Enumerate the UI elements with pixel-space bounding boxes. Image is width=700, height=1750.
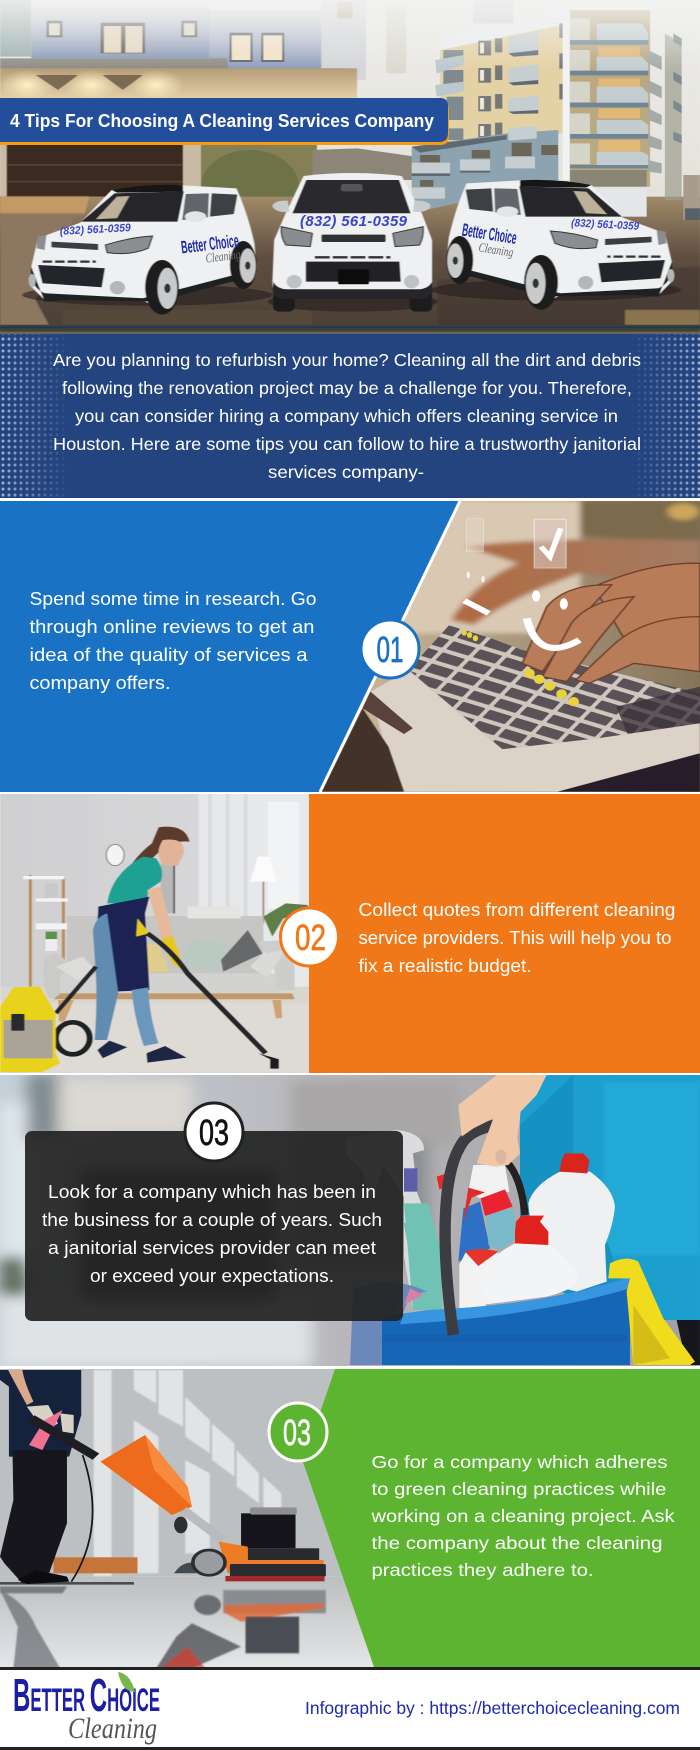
right bottle bbox=[528, 1172, 615, 1292]
front bottle bbox=[486, 1244, 568, 1304]
handle bbox=[445, 1125, 495, 1335]
yellow cloth bbox=[608, 1259, 695, 1365]
car left: logo: Cleaning bbox=[205, 246, 242, 266]
tip 1 text: company offers. bbox=[30, 673, 170, 693]
tip 1 text: Spend some time in research. Go bbox=[30, 589, 316, 609]
panel: tip 4 bbox=[0, 1367, 700, 1668]
photo: hands on laptop keyboard bbox=[312, 500, 700, 793]
title banner bbox=[0, 98, 449, 145]
panel: introduction bbox=[0, 334, 700, 498]
tip 4 text: working on a cleaning project. Ask bbox=[370, 1506, 675, 1526]
car left: logo bbox=[181, 234, 240, 262]
tip 3 text: a janitorial services provider can meet bbox=[48, 1238, 376, 1258]
folded cloth beside the bucket bbox=[350, 1282, 427, 1365]
tip 4 text: to green cleaning practices while bbox=[372, 1479, 666, 1499]
intro text bbox=[53, 350, 641, 482]
tip 2 text: Collect quotes from different cleaning bbox=[358, 900, 676, 920]
logo: Better Choice Cleaning: Cleaning bbox=[68, 1712, 157, 1745]
hero photo: house, tower and cars bbox=[0, 0, 700, 335]
left small bottle bbox=[459, 1252, 498, 1308]
car left: phone number: (832) 561-0359 bbox=[60, 222, 132, 238]
footer bbox=[0, 1667, 700, 1750]
morning haze over the top of the scene bbox=[0, 0, 700, 70]
bucket body bbox=[382, 1277, 630, 1365]
badge 03 dark: 03 bbox=[199, 1112, 229, 1153]
tip 4 text: the company about the cleaning bbox=[372, 1533, 662, 1553]
logo: Better Choice Cleaning bbox=[13, 1669, 160, 1745]
tip 2 text bbox=[358, 900, 676, 976]
tip 1 text: through online reviews to get an bbox=[30, 617, 314, 637]
logo: Better Choice Cleaning: BETTER CHOICE bbox=[13, 1669, 160, 1721]
photo: woman vacuuming living room bbox=[0, 793, 312, 1077]
badge 03 green: 03 bbox=[283, 1412, 311, 1453]
car right: phone number: (832) 561-0359 bbox=[571, 217, 640, 233]
badge 01: 01 bbox=[376, 629, 404, 670]
panel: tip 2 bbox=[0, 793, 700, 1077]
badge 02: 02 bbox=[295, 917, 326, 958]
intro text: you can consider hiring a company which offers cleaning service in bbox=[75, 406, 618, 426]
spray bottle bbox=[392, 1130, 424, 1310]
tip 4 text: Go for a company which adheres bbox=[372, 1452, 668, 1472]
tip 4 text: practices they adhere to. bbox=[372, 1560, 594, 1580]
car right: logo: Cleaning bbox=[478, 239, 515, 260]
car centre bbox=[268, 173, 437, 312]
website credit: Infographic by : https://betterchoicecleaning.com bbox=[305, 1698, 680, 1718]
hand bbox=[458, 1075, 547, 1167]
photo: floor polishing machine bbox=[0, 1367, 384, 1668]
tip 3 text: Look for a company which has been in bbox=[48, 1182, 376, 1202]
car right: logo bbox=[462, 223, 516, 259]
woman bbox=[132, 826, 190, 864]
intro text: services company- bbox=[268, 462, 424, 482]
dark text box bbox=[25, 1131, 403, 1321]
tip 1 text bbox=[30, 589, 316, 693]
photo: bucket of cleaning supplies bbox=[0, 1073, 700, 1367]
car left: logo: Better Choice bbox=[180, 231, 240, 257]
car left bbox=[22, 185, 272, 315]
lamp bbox=[250, 857, 277, 882]
badge 02 bbox=[280, 908, 338, 966]
vacuum bbox=[147, 933, 266, 1053]
car centre: phone number: (832) 561-0359 bbox=[300, 213, 408, 230]
intro text: Houston. Here are some tips you can follow to hire a trustworthy janitorial bbox=[53, 434, 641, 454]
tip 4 text bbox=[370, 1452, 675, 1580]
tip 3 text bbox=[42, 1182, 382, 1286]
panel: tip 1 bbox=[0, 500, 700, 793]
tip 2 text: service providers. This will help you to bbox=[358, 928, 672, 948]
intro text: Are you planning to refurbish your home? Cleaning all the dirt and debris bbox=[53, 350, 641, 370]
hero photo: house, tower and cars: Better Choice bbox=[461, 220, 518, 248]
tip 2 text: fix a realistic budget. bbox=[358, 956, 532, 976]
machine bbox=[31, 1418, 96, 1457]
title: 4 Tips For Choosing A Cleaning Services Company bbox=[10, 110, 435, 131]
badge 03 dark bbox=[185, 1103, 243, 1161]
clock bbox=[106, 844, 124, 866]
intro text: following the renovation project may be a challenge for you. Therefore, bbox=[62, 378, 632, 398]
panel: tip 3 bbox=[0, 1073, 700, 1367]
badge 01 bbox=[361, 620, 419, 678]
bucket, bottles and hand bbox=[350, 1075, 700, 1365]
badge 03 green bbox=[269, 1403, 327, 1461]
back bottle bbox=[468, 1165, 509, 1198]
worker bbox=[0, 1370, 81, 1457]
tip 3 text: or exceed your expectations. bbox=[90, 1266, 334, 1286]
tip 3 text: the business for a couple of years. Such bbox=[42, 1210, 382, 1230]
green shape bbox=[303, 1369, 700, 1667]
sofa bbox=[67, 916, 264, 974]
fingers bbox=[522, 563, 700, 683]
car right bbox=[431, 180, 681, 310]
shelf bbox=[30, 875, 63, 987]
tip 1 text: idea of the quality of services a bbox=[30, 645, 309, 665]
apartment tower bbox=[412, 0, 700, 220]
